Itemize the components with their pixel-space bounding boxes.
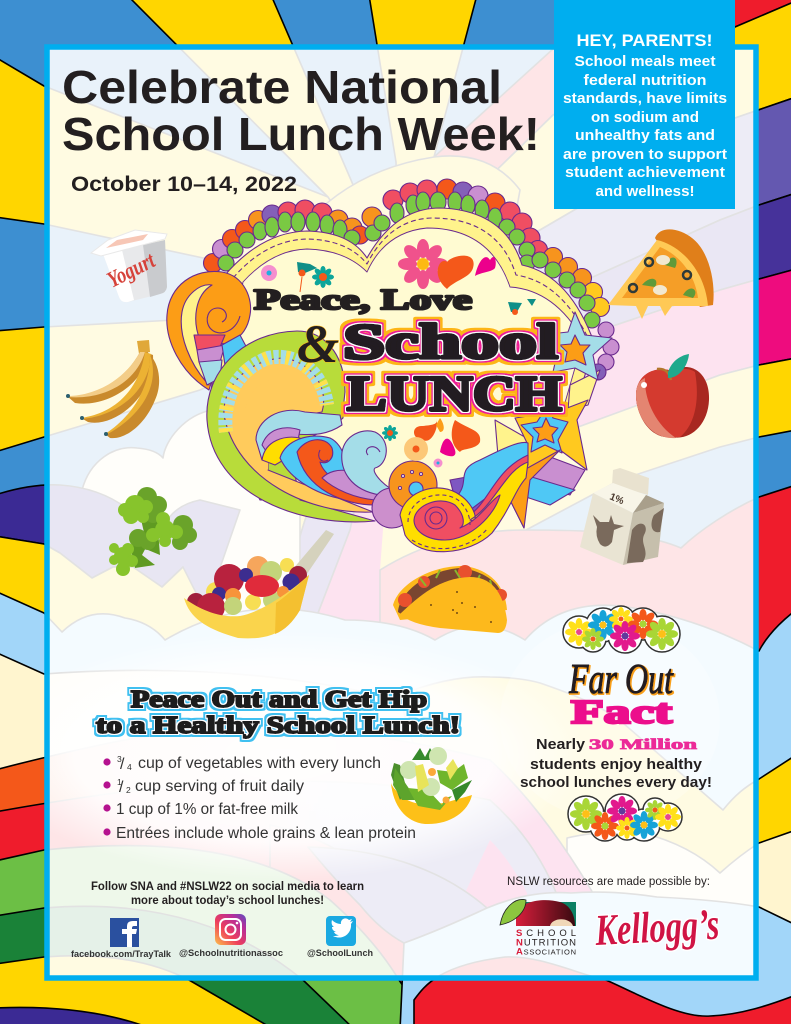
icon: salad bowl: [391, 747, 472, 824]
logo stars and stripes: [495, 312, 612, 528]
fact text: Nearly: [536, 736, 586, 753]
callout: hey parents: and wellness!: [596, 183, 694, 200]
icon: fruit bowl: [184, 530, 334, 638]
logo: Kellogg's: Kellogg’s: [593, 900, 720, 955]
heading: peace out and get hip: to a Healthy School Lunch!: [96, 713, 460, 739]
panel: far out fact: [520, 606, 712, 841]
title: School Lunch Week!: [62, 108, 540, 160]
icon: taco: [393, 565, 507, 633]
callout: hey parents: student achievement: [565, 164, 725, 181]
social handles: @Schoolnutritionassoc: [179, 948, 283, 959]
icon: bananas: [66, 340, 159, 438]
logo green petals: [218, 192, 600, 328]
logo: school nutrition association: S CHOOL: [516, 928, 576, 939]
icon: instagram: [215, 914, 246, 945]
text: follow SNA: more about today’s school lunches!: [131, 895, 324, 907]
icon: yogurt: Yogurt: [103, 247, 159, 292]
logo yellow band and cream body: [210, 208, 595, 500]
logo outer petals: [204, 179, 619, 380]
heading: peace out and get hip: [96, 687, 460, 739]
logo green swirl: [207, 331, 375, 522]
icon: pizza: [608, 229, 714, 319]
icon: apple: [636, 354, 709, 438]
logo orange swirl: [167, 271, 251, 390]
logo: school nutrition association: [500, 900, 576, 958]
logo: Peace, Love and School Lunch: [167, 179, 619, 552]
fact text: students enjoy healthy: [530, 756, 703, 773]
callout: hey parents: HEY, PARENTS!: [576, 31, 712, 50]
fact heading: Fact: [571, 694, 673, 731]
heading: peace out and get hip: Peace Out and Get Hip: [131, 687, 427, 713]
list: nutrition points: cup of vegetables with every lunch: [138, 755, 381, 772]
logo text Peace, Love: Peace, Love: [254, 284, 472, 316]
icon: twitter: [326, 916, 356, 946]
far out heading: Far Out: [568, 657, 674, 703]
social handles: [71, 948, 373, 960]
callout: hey parents: standards, have limits: [563, 90, 727, 107]
text: follow SNA: Follow SNA and #NSLW22 on social media to learn: [91, 881, 364, 893]
list: nutrition points: 1 cup of 1% or fat-free milk: [116, 801, 298, 818]
list: nutrition points: /: [119, 779, 124, 796]
logo decorative flowers and hearts: [261, 239, 536, 468]
list: nutrition points: [103, 754, 416, 842]
flower sticker top: [563, 606, 680, 653]
list: nutrition points: 1: [117, 777, 122, 787]
flower sticker bottom: [568, 794, 682, 841]
logo rainbow spiral: [400, 442, 528, 552]
icon: milk carton: 1%: [608, 492, 625, 507]
text: follow SNA: [91, 881, 364, 907]
callout: hey parents: federal nutrition: [584, 72, 706, 89]
list: nutrition points: Entrées include whole grains & lean protein: [116, 825, 416, 842]
logo text School: School: [343, 313, 558, 369]
title: Celebrate National: [62, 61, 502, 113]
social handles: @SchoolLunch: [307, 948, 373, 959]
callout: hey parents: unhealthy fats and: [575, 127, 715, 144]
fact text: 30 Million: [589, 737, 698, 753]
logo: school nutrition association: ASSOCIATION: [516, 946, 576, 958]
list: nutrition points: cup serving of fruit daily: [135, 778, 304, 795]
callout: hey parents: School meals meet: [574, 53, 716, 70]
title: [62, 61, 540, 160]
callout: hey parents: are proven to support: [563, 146, 727, 163]
icon: yogurt: [91, 230, 167, 302]
fact text: [520, 736, 712, 791]
callout: hey parents: on sodium and: [591, 109, 699, 126]
list: nutrition points: 4: [127, 762, 132, 772]
logo text LUNCH: LUNCH: [347, 365, 562, 421]
date: October 10–14, 2022: [71, 173, 297, 196]
icon: milk carton: [580, 468, 664, 565]
logo donuts: [372, 461, 437, 528]
list: nutrition points: 3: [117, 754, 122, 764]
icon: broccoli: [109, 487, 197, 576]
callout: hey parents: [554, 0, 735, 209]
list: nutrition points: 2: [126, 785, 131, 795]
fact text: school lunches every day!: [520, 774, 712, 791]
list: nutrition points: /: [120, 756, 125, 773]
icon: facebook: [110, 918, 139, 947]
social handles: facebook.com/TrayTalk: [71, 949, 172, 960]
logo blue and red waves: [280, 431, 398, 505]
logo ampersand: &: [297, 314, 339, 374]
logo: school nutrition association: NUTRITION: [516, 938, 576, 948]
text: sponsors: NSLW resources are made possible by:: [507, 876, 710, 888]
